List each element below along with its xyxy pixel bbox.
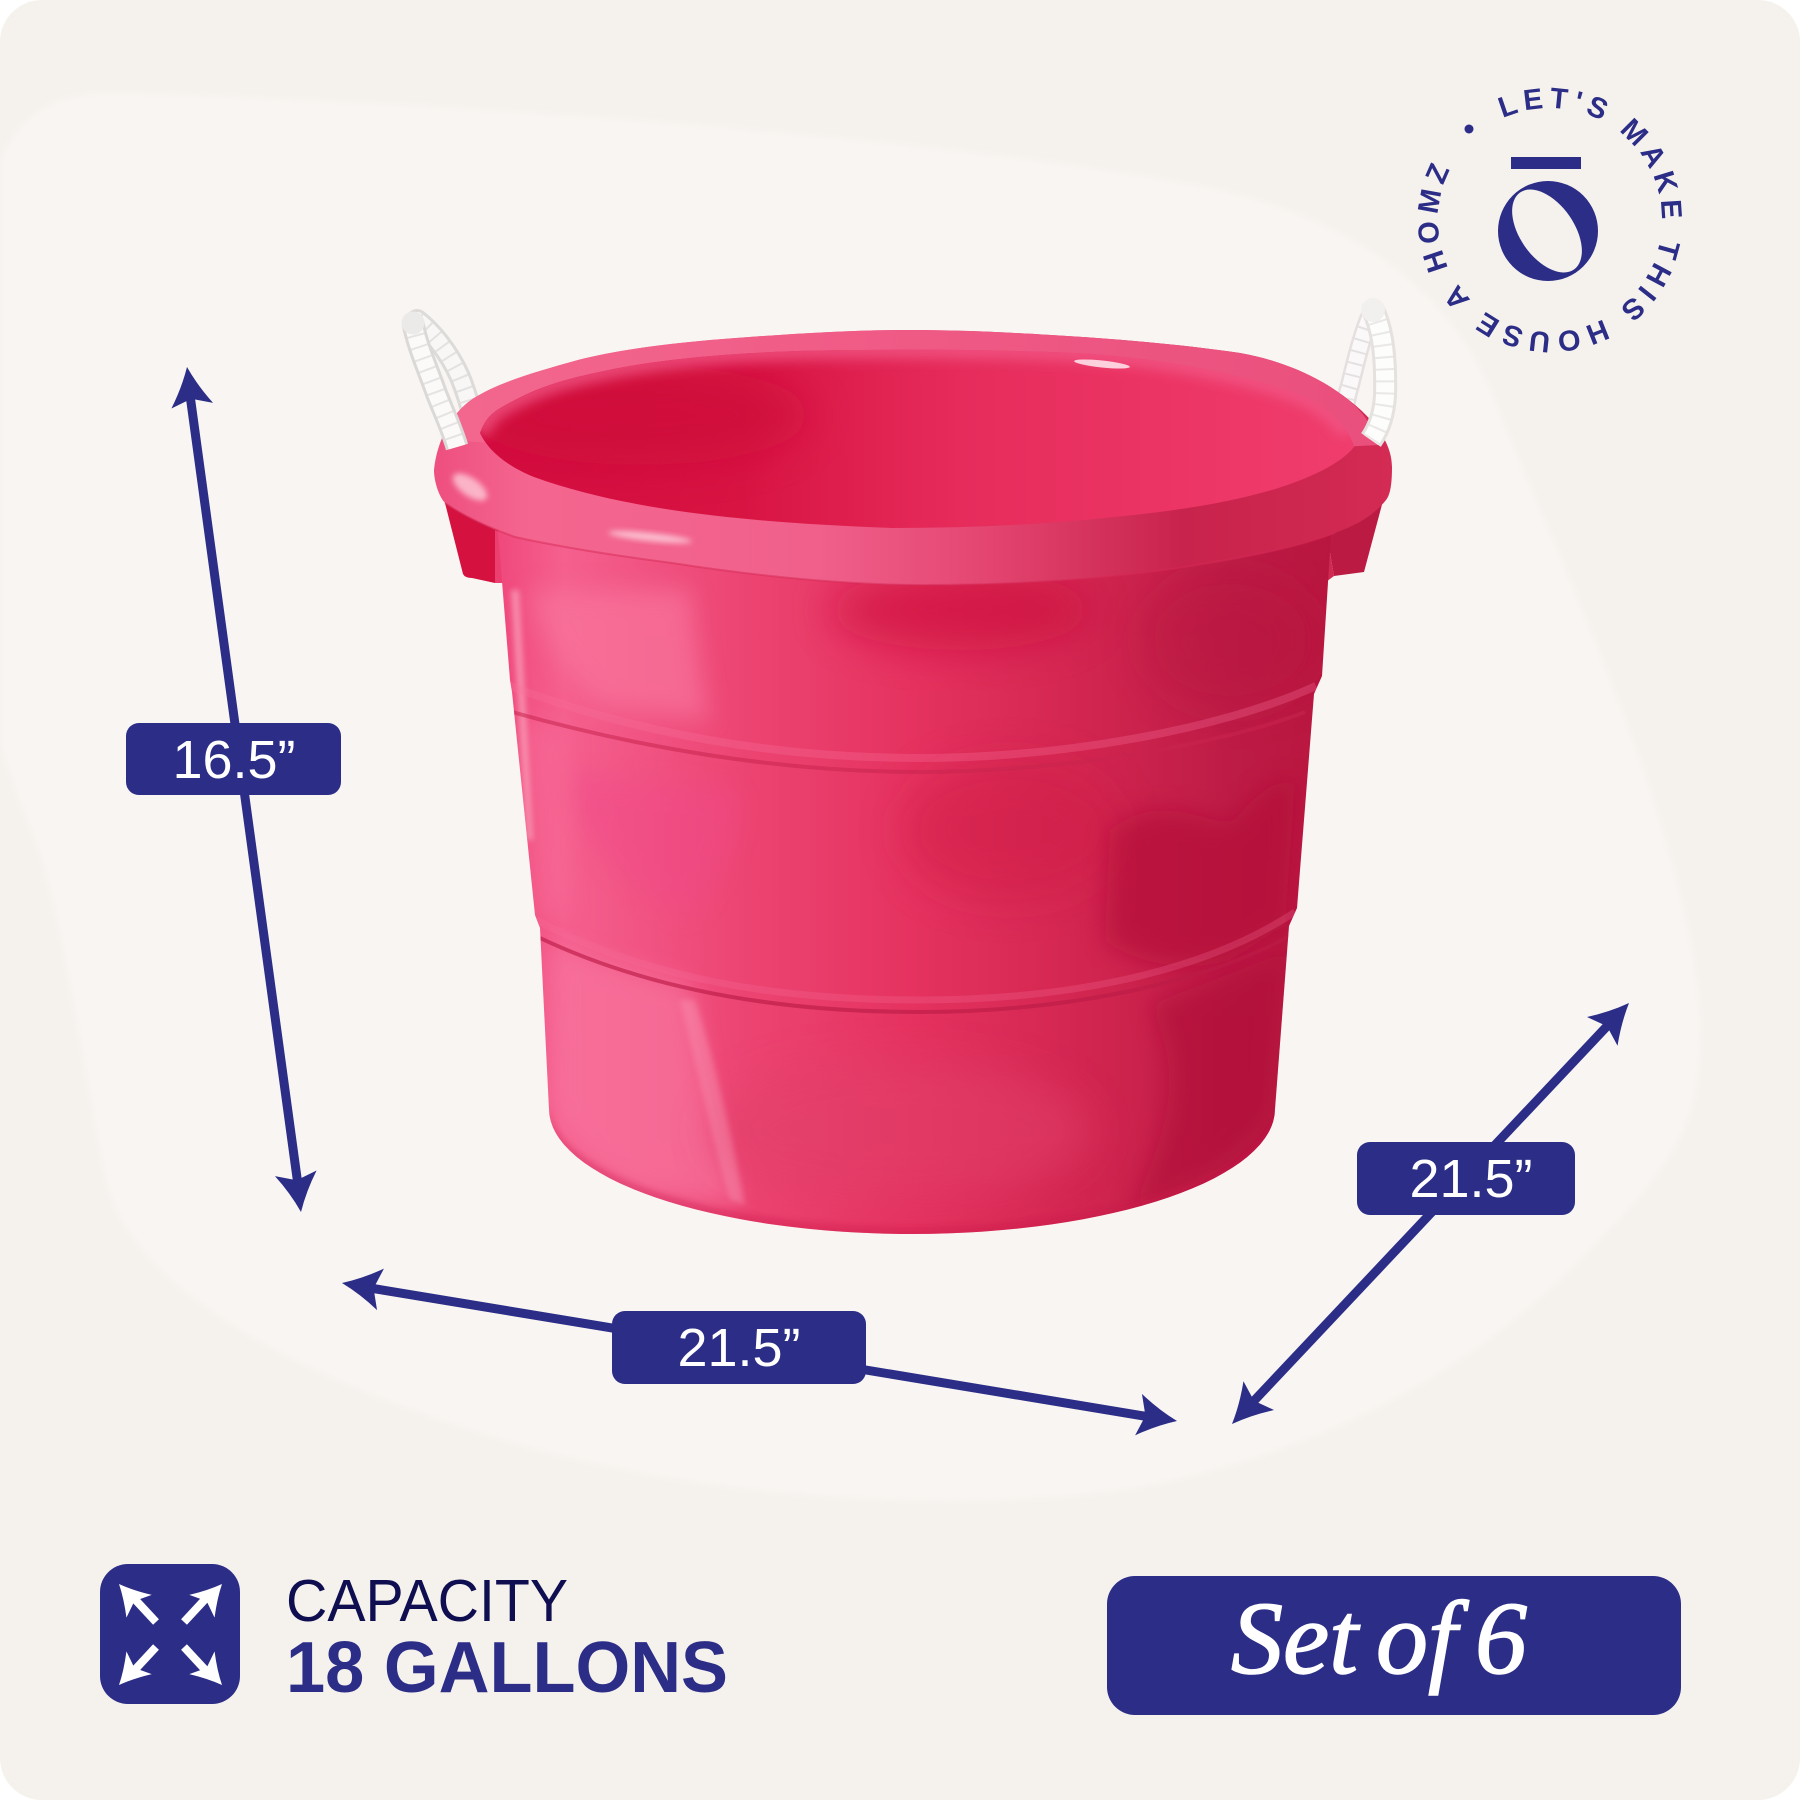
tub rim (434, 330, 1392, 585)
label: depth 21.5: 21.5” (1409, 1149, 1533, 1209)
lobe: upper left (530, 590, 710, 720)
arrow: width (339, 1262, 1180, 1442)
lobe: middle left (586, 792, 719, 842)
handle bracket: left (445, 503, 517, 583)
tub body (480, 510, 1350, 1250)
set of 6 badge: Set of 6 (1231, 1581, 1527, 1696)
upper right shade (1324, 640, 1325, 649)
arrow: height (166, 364, 322, 1215)
capacity block (100, 1564, 728, 1708)
lobe: lower centre (948, 1088, 1076, 1170)
lobe: lower right dark (1130, 950, 1290, 1212)
highlight streak: left edge (511, 590, 533, 840)
rim gloss: left (448, 468, 492, 506)
badge dot (1464, 124, 1474, 134)
rim gloss: front (608, 529, 692, 545)
lobe: middle right dark (1105, 780, 1295, 966)
rope back strand: left (417, 320, 473, 418)
brand badge (1418, 88, 1682, 352)
interior back lip (480, 350, 1348, 433)
sheen: top centre red (830, 570, 1090, 650)
capacity value: 18 GALLONS (286, 1628, 728, 1708)
base shadow (551, 1119, 1270, 1234)
label: width 21.5 (612, 1311, 866, 1384)
handle bracket: right (1310, 497, 1384, 590)
interior shadow (742, 402, 782, 424)
label: 16.5: 16.5” (172, 730, 296, 790)
rope front strand: right (1361, 298, 1385, 440)
set of 6 badge (1107, 1576, 1681, 1715)
rim back ledge (446, 330, 1378, 470)
depth dimension (1217, 989, 1644, 1438)
lobe: middle centre (912, 778, 1013, 882)
logo bar (1511, 157, 1581, 169)
label: 16.5 (126, 723, 341, 795)
highlight streak: lower (680, 1000, 745, 1205)
tub opening (480, 350, 1354, 528)
width dimension (339, 1262, 1180, 1442)
lobe: middle left edge (530, 728, 555, 890)
label: width 21.5: 21.5” (677, 1318, 801, 1378)
rim lower edge line (445, 503, 1335, 585)
lobe: lower left (549, 945, 740, 1205)
label: depth 21.5 (1357, 1142, 1575, 1215)
soft background blob (0, 92, 1701, 1502)
rib: lower (536, 912, 1295, 1012)
rib: upper (510, 686, 1316, 772)
rope front strand: left (402, 312, 457, 447)
rim gloss: top right (1074, 358, 1130, 370)
capacity label: CAPACITY (286, 1568, 568, 1634)
icon: expand arrows (100, 1564, 240, 1704)
arrow: depth (1217, 989, 1644, 1438)
height dimension (126, 364, 341, 1215)
rope back strand: right (1345, 317, 1370, 412)
circular tagline: LET'S MAKE THIS HOUSE A HOMZ (1418, 88, 1682, 352)
logo ring (1498, 177, 1598, 285)
pink tub with rope handles (402, 298, 1392, 1250)
